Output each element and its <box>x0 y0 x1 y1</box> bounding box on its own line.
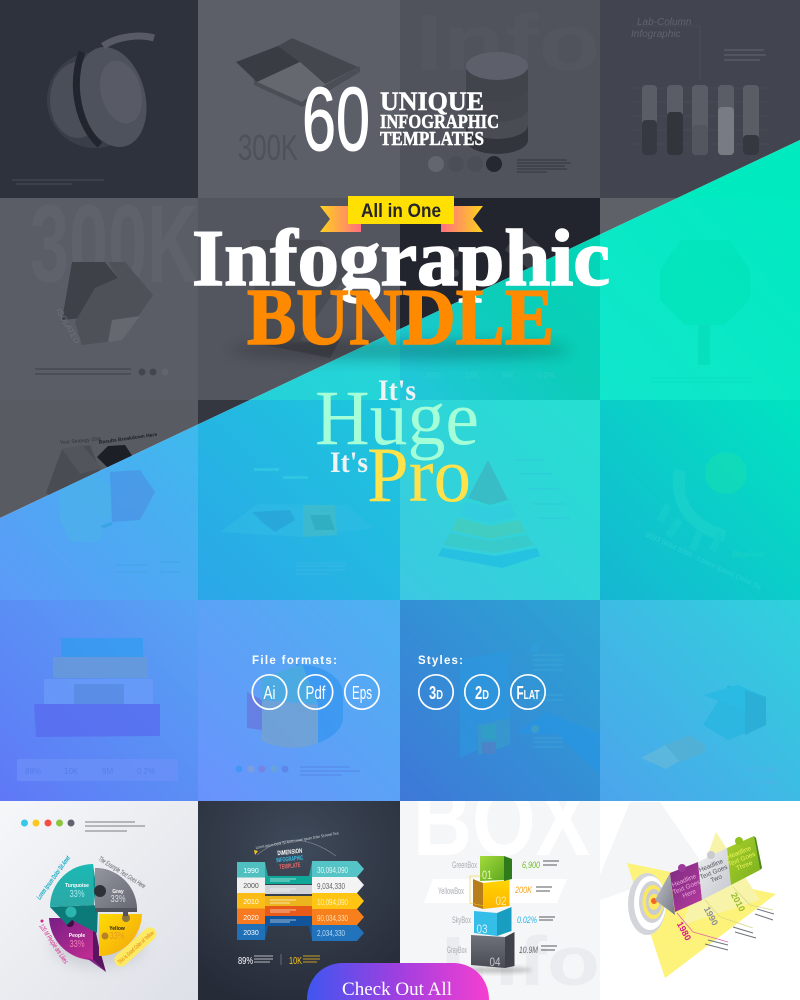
gray piece: 33% <box>110 894 126 905</box>
box values: 6,900 <box>522 860 540 870</box>
template preview: cube with ghost 300K: ISOLATED <box>54 307 82 345</box>
template preview: cube with ghost 300K: 300K <box>30 183 198 306</box>
format badges <box>252 675 379 709</box>
faint stepped blocks: 0.2% <box>137 767 155 776</box>
styles <box>418 655 545 709</box>
arc headline <box>254 830 340 856</box>
box 03 sky <box>474 907 512 936</box>
panel 2 gray: Two <box>710 873 724 885</box>
box 01 green <box>480 856 512 882</box>
template preview: cylinder stack <box>415 0 600 172</box>
ribbon centre bands <box>265 862 312 940</box>
faint stepped blocks <box>17 638 178 781</box>
box 04 gray <box>471 932 514 969</box>
box 02 yellow: 02 <box>496 894 507 908</box>
background: dark template tiles <box>0 0 800 518</box>
faint gear: BlueGear <box>732 550 766 559</box>
file formats: Ai <box>264 683 276 703</box>
panel 3 green <box>724 836 762 885</box>
yellow piece: Yellow <box>109 926 125 932</box>
panel 3 green: Three <box>735 859 754 872</box>
headline words <box>380 87 499 150</box>
box labels <box>438 860 477 955</box>
ribbon title <box>276 848 304 871</box>
ribbon left column years: 2010 <box>243 899 259 906</box>
tagline: It's Huge It's Pro: It's <box>330 446 368 479</box>
tagline: It's Huge It's Pro <box>315 374 479 518</box>
faint stepped blocks: 89% <box>25 767 41 776</box>
panel 1 purple: Here <box>682 888 698 900</box>
ribbon title: TEMPLATE <box>279 862 301 871</box>
box values <box>514 860 540 955</box>
ghost word: Info: Info <box>441 922 600 1000</box>
box labels: GreenBox <box>452 860 477 870</box>
yellow piece <box>99 911 142 956</box>
template preview: dark blocks above diagonal: Your Strategy 25% <box>60 436 102 446</box>
main title: BUNDLE <box>247 274 554 362</box>
ribbon right arrows values <box>312 861 364 941</box>
purple piece: 33% <box>70 939 85 950</box>
box 01 green: 01 <box>482 868 492 882</box>
ribbon left column years: 2000 <box>243 883 259 890</box>
ribbon right arrows values: 9,034,330 <box>317 881 345 891</box>
template preview: lab columns: Lab-Column <box>637 17 692 28</box>
template preview: dark blocks above diagonal <box>46 433 157 495</box>
ribbon left column years: 1990 <box>243 868 259 875</box>
faint stats row: 9M <box>502 371 513 380</box>
styles: 2D <box>475 683 489 703</box>
ribbon stats <box>238 954 320 967</box>
yellow pill label <box>112 925 159 969</box>
ghost word: BOX: BOX <box>413 765 590 877</box>
purple piece <box>49 918 106 972</box>
main title <box>192 215 610 362</box>
tagline: It's Huge It's Pro: Pro <box>367 431 471 518</box>
template preview: puzzle <box>236 38 360 168</box>
gray piece <box>94 868 137 912</box>
teal piece: 33% <box>70 889 85 900</box>
headline words: INFOGRAPHIC <box>380 111 499 133</box>
blue-green gradient overlay panel <box>0 130 800 801</box>
target <box>628 873 666 935</box>
top headline: 60 unique infographic templates <box>302 70 499 170</box>
ribbon: All in One <box>320 196 483 232</box>
timeline connectors <box>705 887 773 928</box>
ribbon title: DIMENSION <box>277 848 303 857</box>
box labels: YellowBox <box>438 886 464 896</box>
headline words: TEMPLATES <box>380 128 484 150</box>
button: Check Out All <box>307 963 489 1000</box>
title shadow <box>230 340 570 360</box>
panel 1 purple: Text Goes <box>672 879 702 896</box>
file formats: File formats: <box>252 655 337 667</box>
timeline years <box>675 891 747 942</box>
teal piece <box>50 864 98 933</box>
faint stepped blocks: 10K <box>64 767 79 776</box>
ribbon stats: 89% <box>238 956 253 967</box>
faint tree <box>650 240 752 382</box>
tile: year ribbons <box>198 801 400 1000</box>
ribbon left column years: 2030 <box>243 930 259 937</box>
yellow pill label: This Is Good Color of Yellow <box>117 930 156 966</box>
yellow piece: 33% <box>110 931 125 942</box>
faint stats row <box>426 372 555 378</box>
ribbon: All in One: All in One <box>361 201 441 222</box>
timeline years: 1990 <box>702 905 720 927</box>
tagline: It's Huge It's Pro: It's <box>378 374 416 407</box>
panel 2 gray <box>696 848 732 900</box>
panel 2 gray: Text Goes <box>699 864 729 881</box>
tile: stacked boxes <box>400 801 600 1000</box>
faint stats row: 10K <box>465 371 480 380</box>
pie arc labels: The Example Text Goes Here <box>97 856 146 890</box>
panel 2 gray: Headline <box>698 858 725 874</box>
template preview: cube with ghost 300K <box>30 183 198 376</box>
pie arc labels <box>36 855 146 966</box>
gray piece: Gray <box>112 889 124 895</box>
ribbon right arrows values: 10,094,090 <box>317 897 348 907</box>
arc headline: Lorem Ipsum Dolor Sit Amet Lorem Ipsum Dolor Sit Amet Text <box>255 830 340 850</box>
ribbon left column years: 2020 <box>243 915 259 922</box>
faint isometric layout <box>460 644 600 775</box>
styles: Styles: <box>418 655 463 667</box>
tile: target timeline <box>600 801 800 1000</box>
white band <box>424 879 567 903</box>
box values: 10.9M <box>519 945 538 955</box>
pie arc labels: 120 M People are Likes <box>37 923 69 966</box>
faint stepped blocks: 9M <box>102 767 113 776</box>
template preview: sphere <box>12 36 157 184</box>
tile: pie puzzle chart <box>0 801 198 1000</box>
template preview: lab columns: Infographic <box>631 29 680 40</box>
styles: FLAT <box>516 683 540 703</box>
faint pyramid <box>438 460 570 568</box>
timeline years: 2010 <box>729 891 747 913</box>
yellow triangles <box>627 832 776 978</box>
timeline years: 1980 <box>675 920 693 942</box>
faint 3D steps <box>641 685 785 786</box>
template preview: dark blocks above diagonal: Results Breakdown Here <box>98 432 158 446</box>
faint gear: 0093 0094 0096 - Lorem Ipsum Dolor Sit <box>644 531 762 591</box>
headline words: UNIQUE <box>380 87 484 116</box>
box labels: SkyBox <box>452 915 471 925</box>
faint 3D steps: Small Column <box>735 765 785 774</box>
faint 3D steps: Infographic <box>738 777 778 786</box>
box 02 yellow <box>473 879 510 909</box>
faint stats row: 0.2% <box>537 371 555 380</box>
faint gear <box>644 452 766 591</box>
ribbon right arrows values: 30,094,090 <box>317 865 348 875</box>
panel 3 green: Headline <box>726 845 753 861</box>
button: Check Out All: Check Out All <box>342 979 452 1000</box>
ribbon right arrows values: 2,034,330 <box>317 928 345 938</box>
template preview: folded bars behind title <box>250 228 545 358</box>
ribbon stats: 10K <box>289 956 302 967</box>
file formats: Pdf <box>306 683 326 703</box>
faint stats row: 89% <box>426 371 442 380</box>
tagline: It's Huge It's Pro: Huge <box>315 374 479 461</box>
panel 3 green: Text Goes <box>727 851 757 868</box>
ghost number: 300K: 300K <box>238 127 298 168</box>
box 03 sky: 03 <box>476 922 488 936</box>
main title: Infographic <box>192 215 610 303</box>
faint map <box>252 468 346 574</box>
file formats <box>252 655 379 709</box>
template preview: cylinder stack: Info <box>415 0 600 87</box>
file formats: Eps <box>352 683 372 703</box>
panel 1 purple <box>669 862 705 912</box>
box values: 0.02% <box>517 915 537 925</box>
style badges <box>419 675 545 709</box>
ribbon right arrows values: 90,034,330 <box>317 913 348 923</box>
template preview: lab columns <box>631 17 769 155</box>
box labels: GrayBox <box>447 945 467 955</box>
faint hexagonal blocks <box>60 470 180 572</box>
ribbon title: INFOGRAPHIC <box>276 855 304 864</box>
box values: 200K <box>514 885 533 895</box>
faint 3D pie <box>236 664 360 775</box>
yellow outline <box>470 876 484 906</box>
pie arc labels: Lorem Ipsum Dolor Sit Amet <box>36 855 72 901</box>
purple piece: People <box>69 933 85 939</box>
ribbon left column years <box>237 862 265 940</box>
box 04 gray: 04 <box>490 955 501 969</box>
colour legend dots <box>21 820 145 831</box>
teal piece: Turquoise <box>65 883 89 889</box>
styles: 3D <box>429 683 443 703</box>
panel 1 purple: Headline <box>671 873 698 889</box>
pyramid tip <box>655 873 675 915</box>
number 60: 60 <box>302 70 370 170</box>
